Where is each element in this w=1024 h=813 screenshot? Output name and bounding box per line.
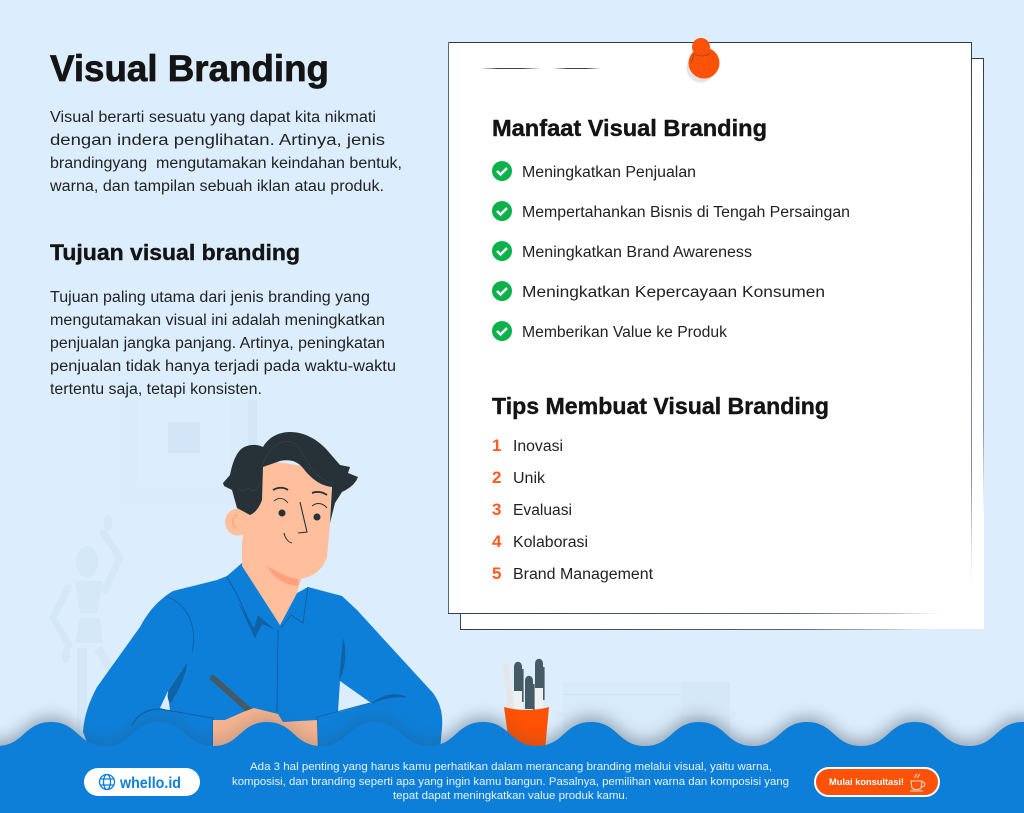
neck xyxy=(242,540,304,625)
logo pill xyxy=(84,768,200,796)
left underarm shade xyxy=(168,663,187,704)
back sheet xyxy=(460,58,984,629)
hair xyxy=(223,432,358,523)
tip 1: Inovasi xyxy=(513,438,563,455)
gap right of torso xyxy=(338,681,371,712)
tip 5: 5 xyxy=(492,564,501,583)
tujuan paragraph: tertentu saja, tetapi konsisten. xyxy=(50,381,262,398)
intro paragraph: Visual berarti sesuatu yang dapat kita nikmati xyxy=(50,109,376,126)
pen cup xyxy=(504,659,549,750)
tujuan paragraph: mengutamakan visual ini adalah meningkatkan xyxy=(50,312,385,329)
heading: manfaat: Manfaat Visual Branding xyxy=(492,115,767,141)
benefits list xyxy=(492,161,850,341)
tip 2: Unik xyxy=(513,470,545,487)
footer text: tepat dapat meningkatkan value produk kamu. xyxy=(393,790,628,802)
tip 4: Kolaborasi xyxy=(513,534,588,551)
man illustration xyxy=(83,432,442,750)
dark pen one xyxy=(514,662,522,709)
pen xyxy=(213,678,250,711)
tujuan paragraph: penjualan jangka panjang. Artinya, peningkatan xyxy=(50,335,385,352)
background picture frame xyxy=(120,400,257,503)
consult button xyxy=(815,768,939,796)
left collar line xyxy=(227,577,255,638)
tip 2: 2 xyxy=(492,468,501,487)
heading: tujuan: Tujuan visual branding xyxy=(50,240,300,265)
benefit 4: Meningkatkan Kepercayaan Konsumen xyxy=(522,284,825,301)
shirt xyxy=(83,563,442,750)
tip 1 xyxy=(492,436,563,455)
white pen xyxy=(506,667,511,710)
consult button: Mulai konsultasi! xyxy=(829,777,904,788)
tujuan paragraph: Tujuan paling utama dari jenis branding yang xyxy=(50,289,370,306)
nose xyxy=(298,502,307,533)
face xyxy=(242,460,332,579)
footer text: komposisi, dan branding seperti apa yang ingin kamu bangun. Pasalnya, pemilihan warna dan komposisi yang xyxy=(232,776,789,788)
intro paragraph: brandingyang mengutamakan keindahan bentuk, xyxy=(50,155,402,172)
sleeve lines xyxy=(132,703,370,748)
wave shadow xyxy=(0,717,1024,790)
smile xyxy=(284,533,292,543)
tip 3: Evaluasi xyxy=(513,502,572,519)
dark pen three xyxy=(535,659,543,710)
front sheet xyxy=(448,42,972,614)
panel: paper sheet xyxy=(448,42,984,630)
pen streaks xyxy=(480,68,541,69)
gap left of torso xyxy=(160,691,170,711)
tujuan paragraph xyxy=(50,289,396,398)
background mannequin xyxy=(53,515,120,735)
icon: globe xyxy=(100,774,114,790)
tip 4 xyxy=(492,532,588,551)
footer wave xyxy=(0,722,1024,813)
eyes xyxy=(278,510,286,516)
tip 5: Brand Management xyxy=(513,566,654,583)
tip 4: 4 xyxy=(492,532,502,551)
dark pen two xyxy=(525,676,533,709)
background stack of papers xyxy=(555,682,736,742)
tip 3: 3 xyxy=(492,500,501,519)
icon: coffee cup xyxy=(910,774,925,791)
hair strands xyxy=(239,442,332,491)
benefit 1: Meningkatkan Penjualan xyxy=(522,164,696,181)
brows and lids xyxy=(273,488,327,495)
shoulder seam xyxy=(167,597,194,652)
intro paragraph xyxy=(49,109,402,195)
ear xyxy=(225,508,251,536)
wave shadow on man and cup xyxy=(83,711,546,746)
tip 2 xyxy=(492,468,545,487)
footer text xyxy=(232,761,789,802)
right underarm shade xyxy=(339,638,345,681)
benefit 5: Memberikan Value ke Produk xyxy=(522,324,727,341)
benefit 4 xyxy=(492,281,825,301)
benefit 2: Mempertahankan Bisnis di Tengah Persaingan xyxy=(522,204,850,221)
right sleeve shade xyxy=(372,695,406,703)
footer text: Ada 3 hal penting yang harus kamu perhatikan dalam merancang branding melalui visual, yaitu warna, xyxy=(250,761,772,773)
hands xyxy=(213,708,318,750)
tujuan paragraph: penjualan tidak hanya terjadi pada waktu-waktu xyxy=(50,358,396,375)
cup body xyxy=(504,707,549,750)
title: Visual Branding xyxy=(50,48,329,89)
placket xyxy=(277,630,278,712)
tip 3 xyxy=(492,500,572,519)
tips list xyxy=(492,436,654,583)
tip 1: 1 xyxy=(492,436,501,455)
benefit 3: Meningkatkan Brand Awareness xyxy=(522,244,752,261)
heading: tips: Tips Membuat Visual Branding xyxy=(492,393,829,419)
icon: push pin xyxy=(686,38,720,82)
right collar xyxy=(281,587,308,628)
left collar shade xyxy=(237,600,274,638)
chin shadow xyxy=(267,566,298,586)
logo pill: whello.id xyxy=(119,775,181,792)
intro paragraph: dengan indera penglihatan. Artinya, jenis xyxy=(50,132,385,149)
intro paragraph: warna, dan tampilan sebuah iklan atau produk. xyxy=(49,178,384,195)
